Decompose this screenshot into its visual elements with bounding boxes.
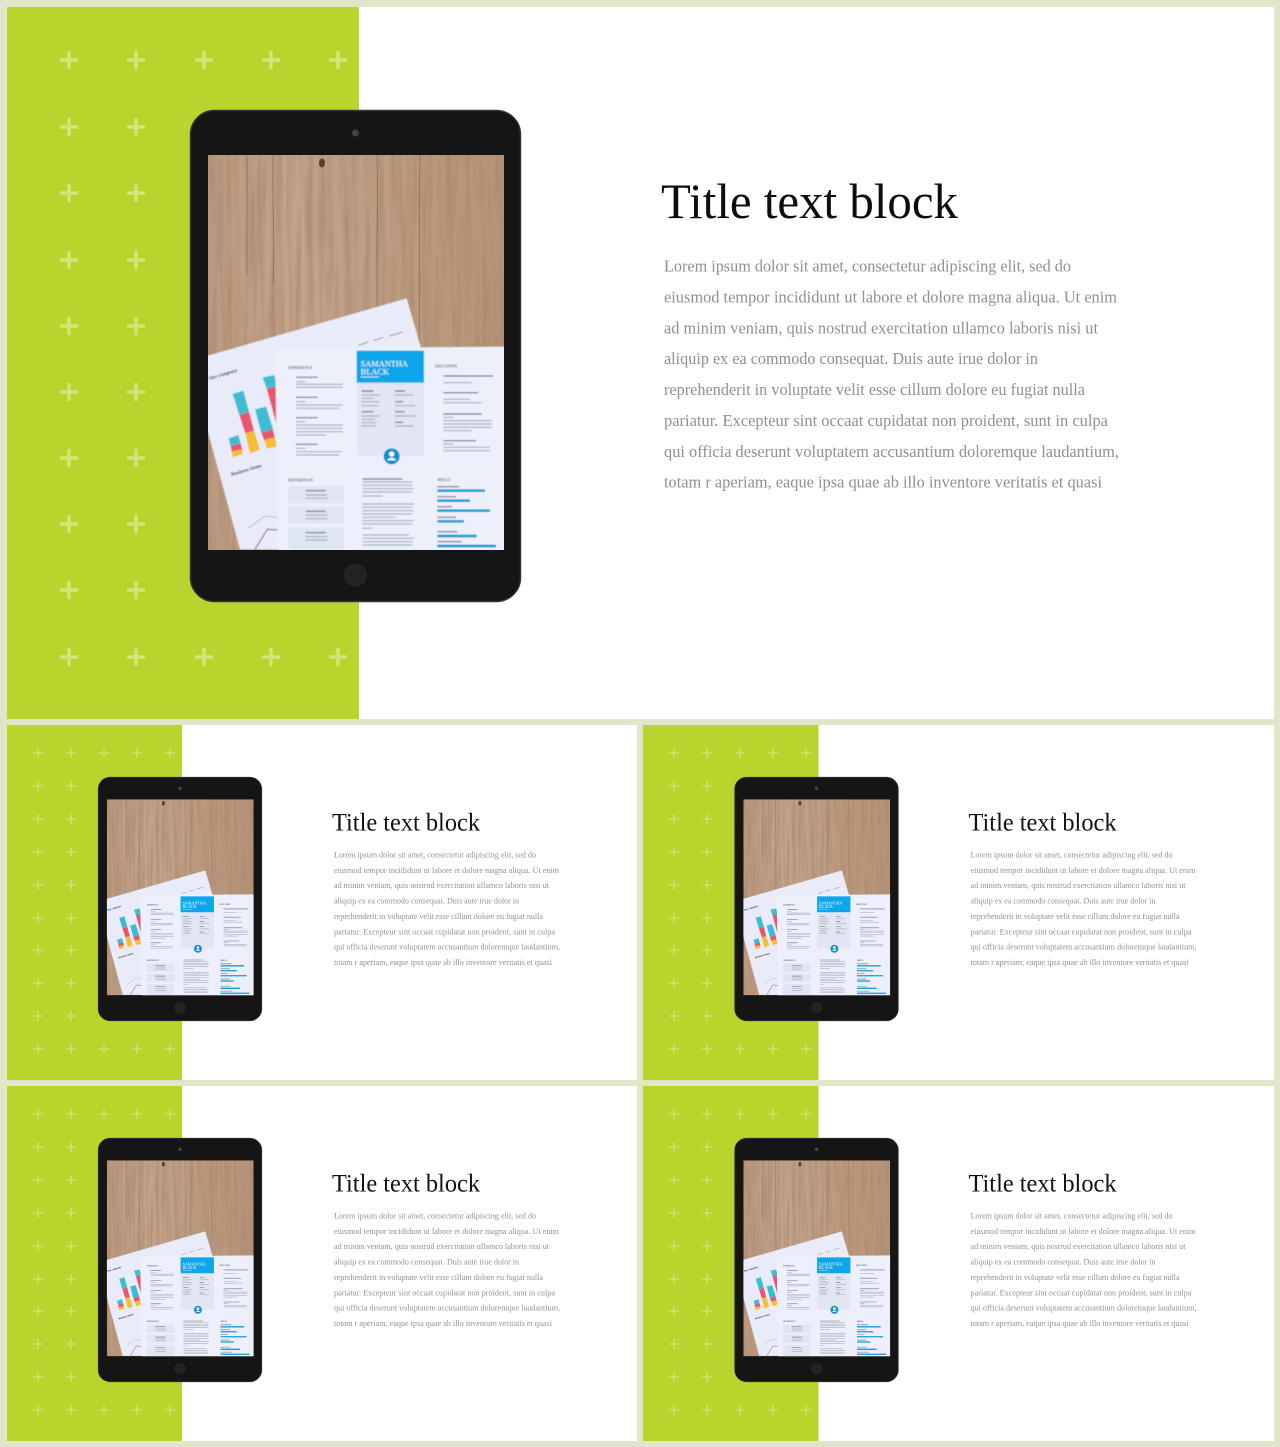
body text: eiusmod tempor incididunt ut labore et dolore magna aliqua. Ut enim [970, 1227, 1196, 1236]
body text: reprehenderit in voluptate velit esse cillum dolore eu fugiat nulla [970, 1273, 1180, 1282]
plus pattern [33, 748, 175, 1054]
body text: aliquip ex ea commodo consequat. Duis aute irue dolor in [664, 349, 1039, 368]
body text: aliquip ex ea commodo consequat. Duis aute irue dolor in [334, 1258, 520, 1267]
body text: qui officia deserunt voluptatem accusantium doloremque laudantium, [334, 1304, 560, 1313]
body text: reprehenderit in voluptate velit esse cillum dolore eu fugiat nulla [334, 1273, 543, 1282]
body text: eiusmod tempor incididunt ut labore et dolore magna aliqua. Ut enim [334, 866, 560, 875]
body text: aliquip ex ea commodo consequat. Duis aute irue dolor in [970, 1258, 1156, 1267]
body text [970, 850, 1196, 967]
body text [664, 257, 1119, 492]
body text: Lorem ipsum dolor sit amet, consectetur adipiscing elit, sed do [334, 850, 536, 860]
body text: eiusmod tempor incididunt ut labore et dolore magna aliqua. Ut enim [970, 866, 1196, 875]
body text: pariatur. Excepteur sint occaat cupidatat non proident, sunt in culpa [970, 927, 1192, 936]
body text [970, 1212, 1196, 1328]
body text: qui officia deserunt voluptatem accusantium doloremque laudantium, [970, 943, 1196, 952]
slide background [643, 1086, 1274, 1441]
body text: totam r aperiam, eaque ipsa quae ab illo inventore veritatis et quasi [334, 1319, 553, 1328]
tablet mockup [735, 1138, 898, 1382]
slide background [643, 725, 1274, 1080]
body text: qui officia deserunt voluptatem accusantium doloremque laudantium, [664, 442, 1119, 461]
body text: aliquip ex ea commodo consequat. Duis aute irue dolor in [970, 897, 1156, 906]
body text: Lorem ipsum dolor sit amet, consectetur adipiscing elit, sed do [664, 257, 1071, 276]
tablet mockup [98, 777, 262, 1021]
body text: qui officia deserunt voluptatem accusantium doloremque laudantium, [334, 943, 560, 952]
plus pattern [33, 1109, 175, 1415]
green side band [643, 1086, 818, 1441]
body text: pariatur. Excepteur sint occaat cupidatat non proident, sunt in culpa [334, 927, 555, 936]
panel: small slide bottom left [7, 1086, 637, 1441]
panel: small slide top left [7, 725, 637, 1080]
plus pattern [60, 51, 347, 666]
plus pattern [669, 1109, 811, 1415]
tablet mockup [98, 1138, 262, 1382]
tablet mockup [190, 110, 520, 602]
body text: Lorem ipsum dolor sit amet, consectetur adipiscing elit, sed do [970, 850, 1172, 860]
title: Title text block [968, 810, 1117, 837]
slide background [7, 7, 1274, 719]
body text: pariatur. Excepteur sint occaat cupidatat non proident, sunt in culpa [970, 1288, 1192, 1297]
slide background [7, 1086, 637, 1441]
panel: small slide bottom right [643, 1086, 1274, 1441]
body text: aliquip ex ea commodo consequat. Duis aute irue dolor in [334, 897, 520, 906]
green side band [7, 7, 359, 719]
body text: Lorem ipsum dolor sit amet, consectetur adipiscing elit, sed do [970, 1212, 1172, 1220]
plus pattern [669, 748, 811, 1054]
green side band [7, 1086, 182, 1441]
title: Title text block [332, 1171, 480, 1198]
body text: pariatur. Excepteur sint occaat cupidatat non proident, sunt in culpa [664, 411, 1109, 430]
panel: large slide [7, 7, 1274, 719]
body text: reprehenderit in voluptate velit esse cillum dolore eu fugiat nulla [334, 912, 543, 921]
body text: pariatur. Excepteur sint occaat cupidatat non proident, sunt in culpa [334, 1288, 555, 1297]
body text: totam r aperiam, eaque ipsa quae ab illo inventore veritatis et quasi [334, 958, 553, 967]
body text [334, 1212, 560, 1328]
green side band [7, 725, 182, 1080]
body text: ad minim veniam, quis nostrud exercitation ullamco laboris nisi ut [664, 318, 1098, 337]
body text: ad minim veniam, quis nostrud exercitation ullamco laboris nisi ut [334, 881, 550, 890]
panel: small slide top right [643, 725, 1274, 1080]
title: Title text block [332, 810, 480, 837]
body text: totam r aperiam, eaque ipsa quae ab illo inventore veritatis et quasi [970, 1319, 1189, 1328]
title: Title text block [661, 173, 958, 229]
body text: ad minim veniam, quis nostrud exercitation ullamco laboris nisi ut [334, 1242, 550, 1251]
body text: totam r aperiam, eaque ipsa quae ab illo inventore veritatis et quasi [664, 473, 1102, 492]
body text: reprehenderit in voluptate velit esse cillum dolore eu fugiat nulla [664, 380, 1086, 399]
body text: eiusmod tempor incididunt ut labore et dolore magna aliqua. Ut enim [664, 288, 1117, 306]
body text: ad minim veniam, quis nostrud exercitation ullamco laboris nisi ut [970, 881, 1186, 890]
body text: Lorem ipsum dolor sit amet, consectetur adipiscing elit, sed do [334, 1212, 536, 1220]
body text: qui officia deserunt voluptatem accusantium doloremque laudantium, [970, 1304, 1196, 1313]
slide background [7, 725, 637, 1080]
green side band [643, 725, 818, 1080]
body text: ad minim veniam, quis nostrud exercitation ullamco laboris nisi ut [970, 1242, 1186, 1251]
body text [334, 850, 560, 967]
body text: totam r aperiam, eaque ipsa quae ab illo inventore veritatis et quasi [970, 958, 1189, 967]
body text: eiusmod tempor incididunt ut labore et dolore magna aliqua. Ut enim [334, 1227, 560, 1236]
tablet mockup [735, 777, 898, 1021]
body text: reprehenderit in voluptate velit esse cillum dolore eu fugiat nulla [970, 912, 1180, 921]
title: Title text block [968, 1171, 1117, 1198]
